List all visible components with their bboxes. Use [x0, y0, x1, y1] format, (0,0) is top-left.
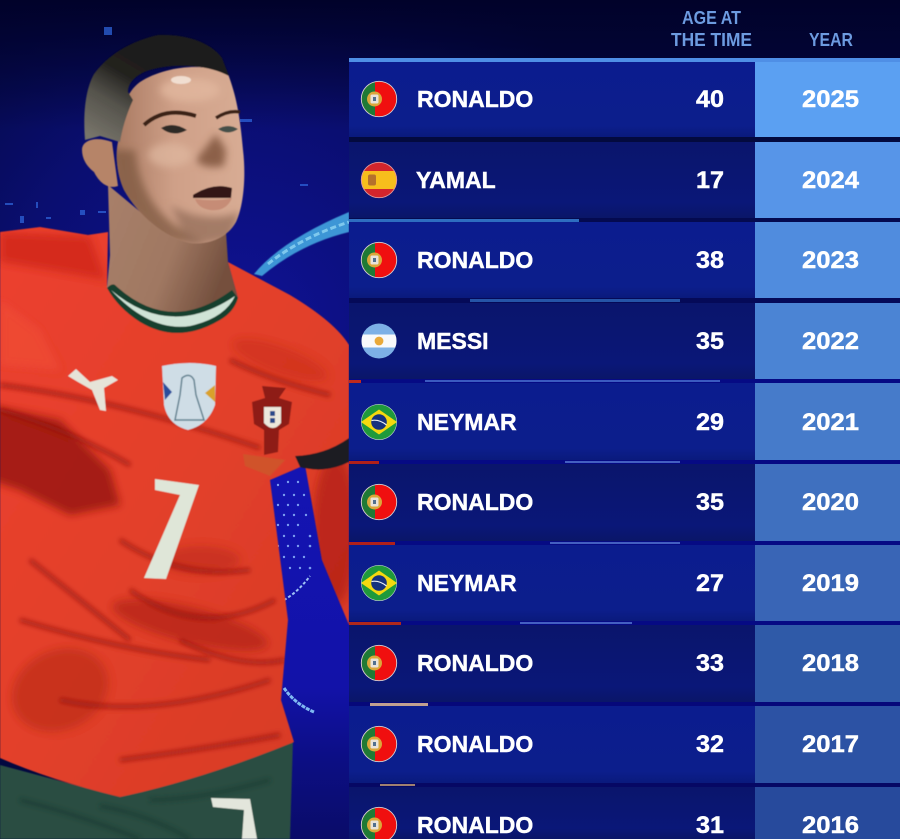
row 2022: [349, 303, 900, 379]
row 2025: RONALDO: [417, 86, 533, 112]
row 2022: MESSI: [417, 328, 489, 354]
column header: year: YEAR: [809, 30, 853, 50]
row 2023: 38: [696, 247, 724, 274]
jersey number 7: [144, 479, 199, 579]
row 2016: 31: [696, 812, 724, 839]
globe arc and data dots: [5, 27, 349, 712]
row 2024: 2024: [802, 167, 860, 194]
row 2019: 2019: [802, 570, 859, 597]
armband: [295, 438, 349, 470]
column header: age at the time: THE TIME: [671, 30, 752, 50]
hair: [84, 35, 229, 142]
eyes brows mouth: [144, 112, 240, 210]
row 2016: 2016: [802, 812, 859, 839]
row 2017: RONALDO: [417, 731, 533, 757]
tournament badge: [162, 363, 216, 430]
row 2018: 33: [696, 650, 724, 677]
row 2024: [349, 142, 900, 218]
row 2018: RONALDO: [417, 650, 533, 676]
row 2021: 2021: [802, 409, 859, 436]
ear: [82, 139, 118, 187]
row 2019: [349, 545, 900, 621]
row 2024: 17: [696, 167, 724, 194]
shorts number 7: [211, 798, 257, 839]
row 2020: [349, 464, 900, 541]
row 2022: 2022: [802, 328, 859, 355]
player photo illustration: [0, 35, 357, 839]
row 2022: 35: [696, 328, 724, 355]
row 2020: 2020: [802, 489, 859, 516]
row 2017: [349, 706, 900, 783]
row 2025: [349, 62, 900, 137]
neck: [107, 185, 238, 317]
row 2016: RONALDO: [417, 812, 533, 838]
row 2019: NEYMAR: [417, 570, 517, 596]
face: [112, 67, 244, 246]
row 2020: RONALDO: [417, 489, 533, 515]
row 2020: 35: [696, 489, 724, 516]
row 2017: 2017: [802, 731, 859, 758]
row 2016: [349, 787, 900, 839]
row 2025: 40: [696, 86, 724, 113]
table gaps with background showing through: [349, 137, 900, 787]
jersey sponsor smudge: [243, 454, 285, 476]
row 2025: 2025: [802, 86, 859, 113]
jersey arm and torso: [0, 227, 357, 797]
row 2021: NEYMAR: [417, 409, 517, 435]
Portugal crest: [252, 386, 292, 455]
row 2024: YAMAL: [416, 167, 496, 193]
column header: age at the time: [671, 8, 752, 50]
jersey collar: [107, 284, 238, 333]
Puma logo: [68, 369, 118, 411]
row 2018: 2018: [802, 650, 859, 677]
row 2023: RONALDO: [417, 247, 533, 273]
column header: age at the time: AGE AT: [682, 8, 741, 28]
row 2019: 27: [696, 570, 724, 597]
shorts: [0, 740, 293, 839]
row 2023: 2023: [802, 247, 859, 274]
table top rule: [349, 58, 900, 62]
row 2023: [349, 222, 900, 298]
row 2021: [349, 383, 900, 460]
table header: [671, 8, 853, 50]
row 2017: 32: [696, 731, 724, 758]
row 2018: [349, 625, 900, 702]
row 2021: 29: [696, 409, 724, 436]
